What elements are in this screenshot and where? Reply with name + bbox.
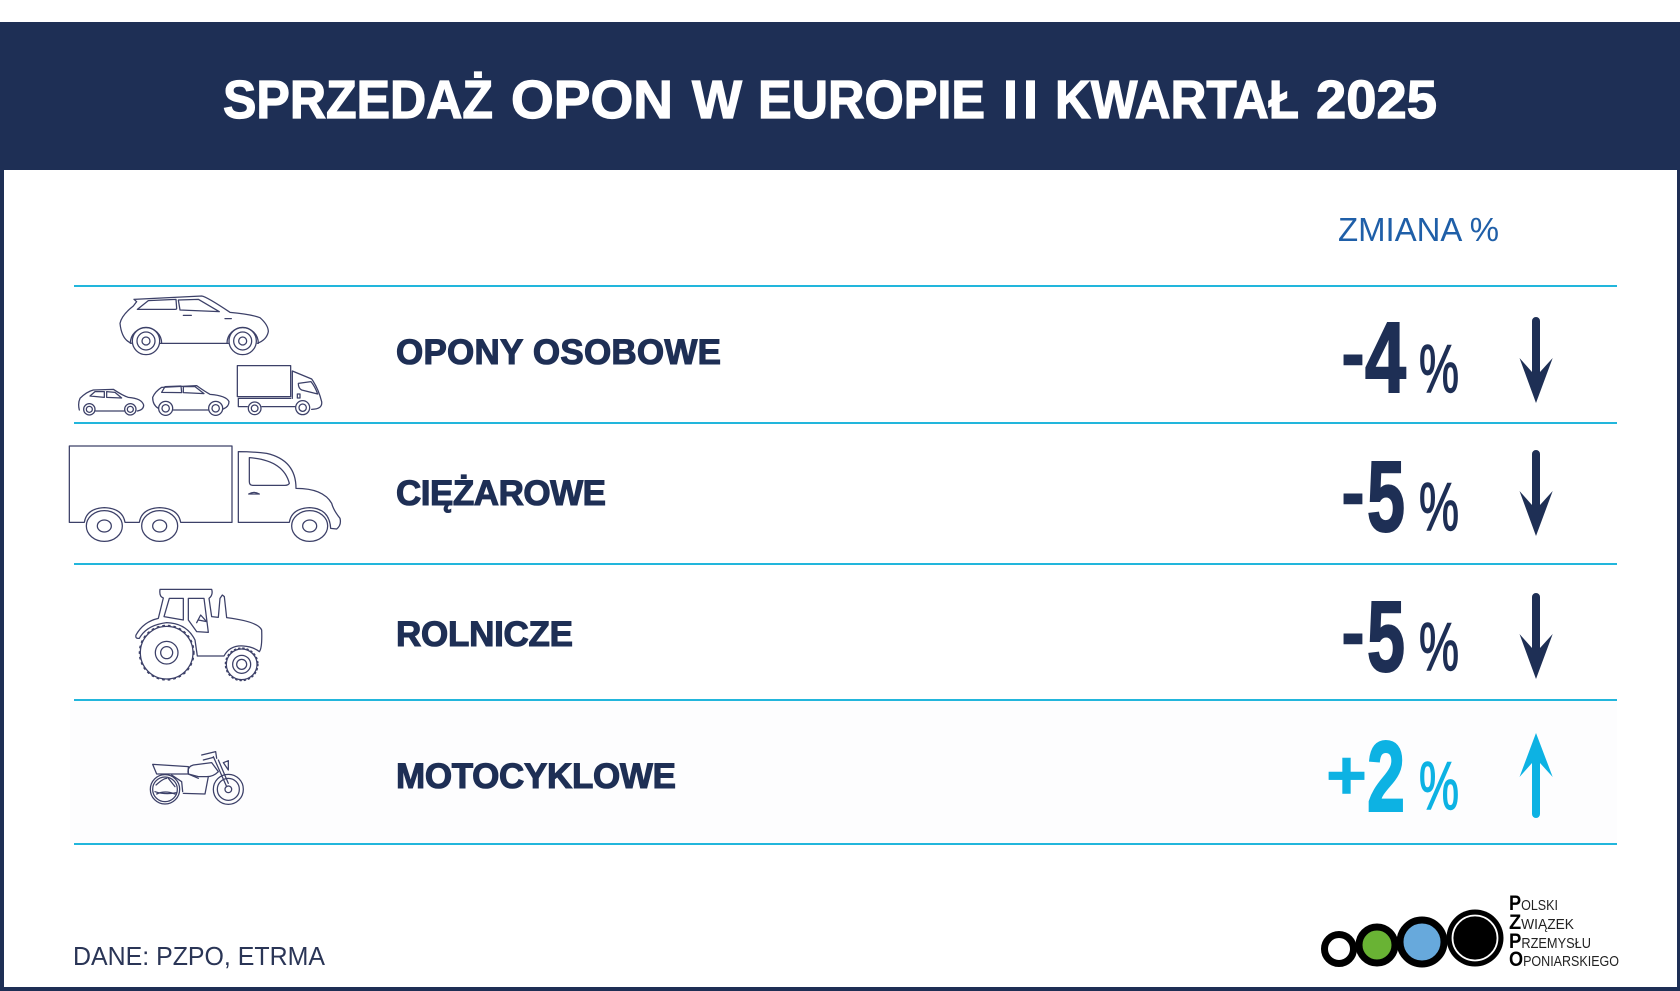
title: OPON [511,70,673,130]
arrow: down [1520,317,1553,403]
title [223,70,1437,130]
row label: agricultural tyres: ROLNICZE [396,615,573,654]
arrow: up [1520,733,1553,818]
title: SPRZEDAŻ [223,70,493,130]
value: -5 % [1341,581,1459,693]
row label: motorcycle tyres: MOTOCYKLOWE [396,757,676,796]
value: +2 % [1326,721,1459,833]
row label: truck tyres: CIĘŻAROWE [396,474,606,513]
title: KWARTAŁ [1055,70,1299,130]
value: -5 %: - [1341,585,1365,680]
icon: truck [69,446,340,541]
title: W [692,70,742,130]
icon: motorcycle [150,752,243,804]
logo text [1509,892,1619,971]
arrow: down [1520,593,1553,679]
icon: tractor [136,589,262,681]
row label: passenger tyres: OPONY OSOBOWE [396,333,721,372]
value: +2 %: % [1419,748,1459,824]
value: -5 %: % [1419,609,1459,685]
title: II [1003,70,1038,130]
value: -4 %: - [1341,306,1365,401]
logo text: POLSKI [1509,892,1558,915]
source note: DANE: PZPO, ETRMA [73,941,326,971]
logo text: ZWIĄZEK [1509,911,1574,934]
value: -4 % [1341,302,1459,414]
value: -5 %: 5 [1367,581,1405,693]
logo circles [1324,910,1504,966]
logo: PZPO [1324,892,1619,971]
logo text: OPONIARSKIEGO [1509,948,1619,971]
value: -5 %: - [1341,445,1365,540]
column heading: ZMIANA % [1338,211,1499,248]
title: EUROPIE [758,70,985,130]
value: -4 %: 4 [1365,302,1406,414]
value: -5 % [1341,441,1459,553]
title: 2025 [1316,70,1437,130]
value: +2 %: + [1326,736,1367,814]
value: -5 %: % [1419,469,1459,545]
icon: cars and van [79,296,322,415]
value: -4 %: % [1419,331,1459,407]
logo text: PRZEMYSŁU [1509,930,1591,953]
header band [0,22,1680,170]
arrow: down [1520,450,1553,536]
value: -5 %: 5 [1367,441,1405,553]
value: +2 %: 2 [1367,721,1405,833]
